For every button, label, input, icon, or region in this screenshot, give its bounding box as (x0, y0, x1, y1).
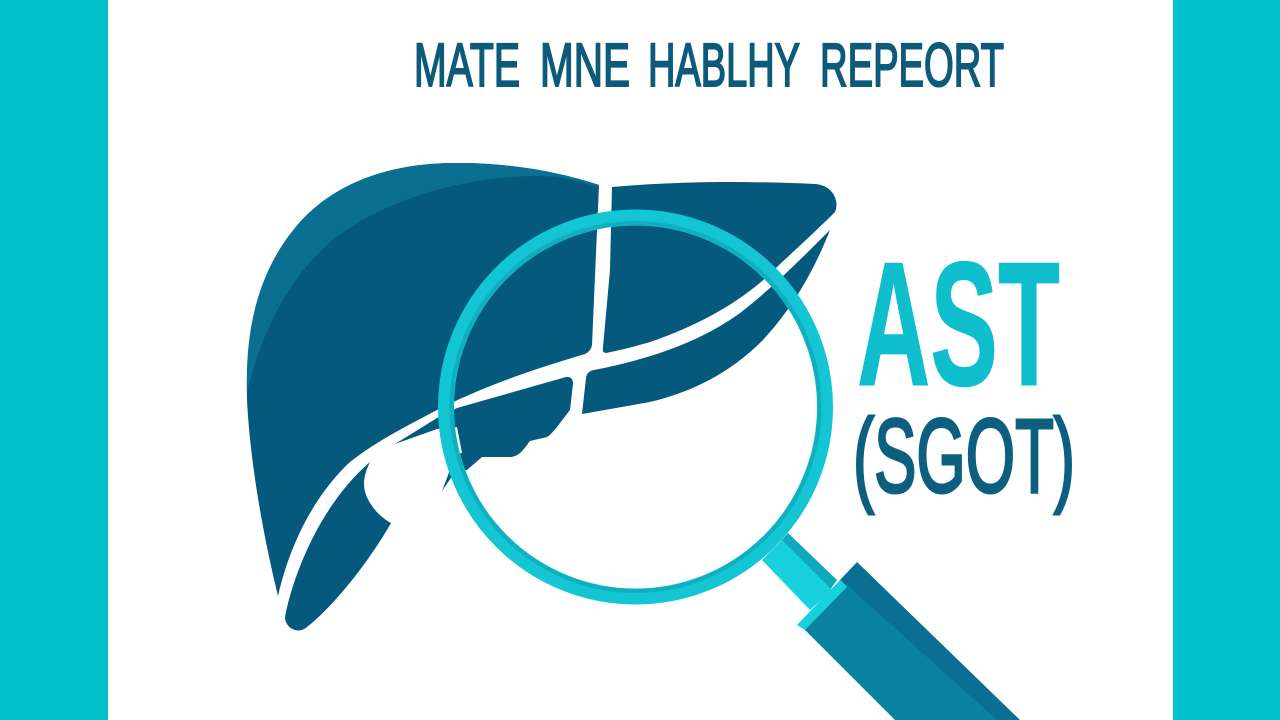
title: MATE (414, 31, 520, 99)
handle dark edge (840, 562, 1020, 720)
lens ring (446, 218, 825, 596)
title: MNE (540, 31, 630, 99)
right teal side band (1173, 0, 1280, 720)
handle collar (797, 580, 847, 630)
label: AST: AST (857, 225, 1060, 423)
liver central segment (395, 377, 573, 491)
liver lower tail (285, 462, 391, 630)
liver right lobe highlight (247, 163, 599, 392)
neck (762, 540, 832, 610)
left teal side band (0, 0, 108, 720)
title (414, 31, 1004, 99)
icon: liver (247, 163, 836, 630)
liver right lobe (247, 163, 599, 596)
handle body (803, 585, 997, 720)
neck shade (780, 533, 837, 590)
liver lower left wedge (582, 230, 830, 414)
title: REPEORT (820, 31, 1004, 99)
label: (SGOT): (SGOT) (853, 398, 1075, 515)
title: HABLHY (648, 31, 800, 99)
lens ring inner shade (452, 223, 820, 591)
icon: magnifying glass (446, 218, 1020, 720)
liver upper left segment (603, 182, 836, 353)
